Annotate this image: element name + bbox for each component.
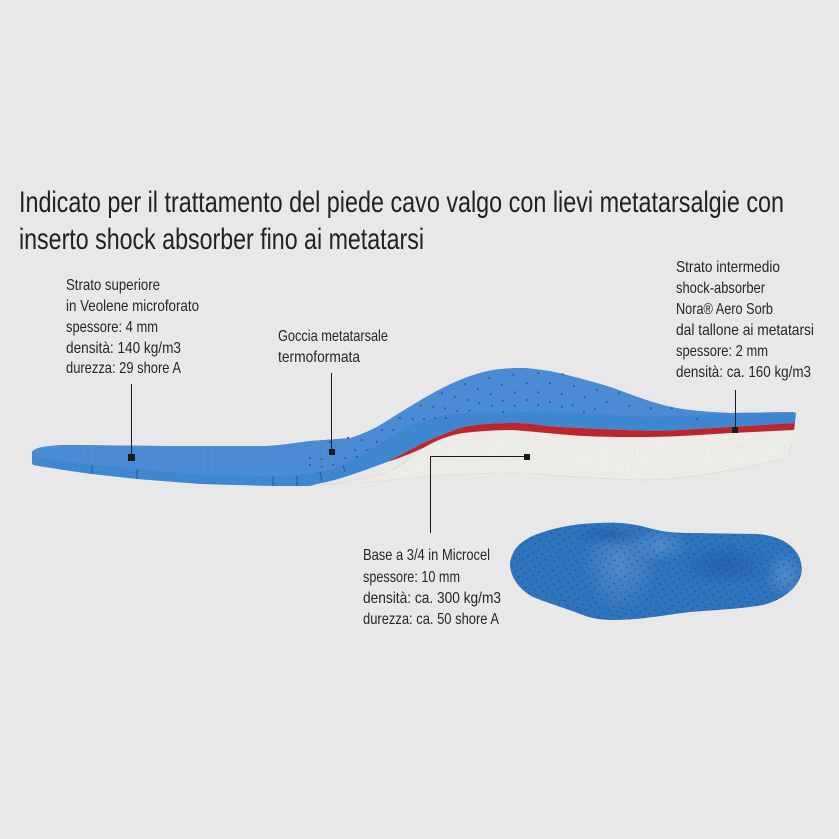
callout: base Microcel: durezza: ca. 50 shore A	[363, 611, 499, 628]
callout: strato intermedio: densità: ca. 160 kg/m3	[676, 364, 811, 381]
callout: base Microcel: spessore: 10 mm	[363, 569, 460, 586]
callout: goccia metatarsale: Goccia metatarsale	[278, 328, 388, 345]
arch perforations	[310, 373, 697, 467]
red shock-absorber layer	[387, 423, 795, 462]
callout: base Microcel: Base a 3/4 in Microcel	[363, 547, 490, 564]
callout: strato superiore: in Veolene microforato	[66, 298, 199, 315]
callout: strato intermedio: Strato intermedio	[676, 259, 780, 276]
callout: strato superiore	[66, 277, 199, 461]
callout: base Microcel	[363, 454, 530, 628]
insole top view	[510, 522, 802, 620]
callout: strato superiore: durezza: 29 shore A	[66, 360, 181, 377]
callout: strato intermedio: dal tallone ai metatarsi	[676, 322, 814, 339]
callout: strato intermedio	[676, 259, 814, 433]
perforation pattern on top surface	[40, 440, 350, 474]
callout: goccia metatarsale	[278, 328, 388, 455]
callout: strato intermedio: shock-absorber	[676, 280, 766, 297]
blue top surface	[32, 368, 793, 476]
callout: strato intermedio: spessore: 2 mm	[676, 343, 768, 360]
callout: strato superiore: spessore: 4 mm	[66, 319, 158, 336]
callout: strato superiore: densità: 140 kg/m3	[66, 340, 181, 357]
callout: strato intermedio: Nora® Aero Sorb	[676, 301, 773, 318]
insole cross-section	[32, 368, 796, 486]
white Microcel base layer	[318, 430, 794, 485]
blue upper layer side	[32, 368, 796, 486]
callout: base Microcel: densità: ca. 300 kg/m3	[363, 590, 501, 607]
callout: goccia metatarsale: termoformata	[278, 349, 360, 366]
callout: strato superiore: Strato superiore	[66, 277, 160, 294]
title: inserto shock absorber fino ai metatarsi	[19, 223, 424, 256]
title	[19, 186, 784, 256]
side notches	[92, 465, 345, 486]
